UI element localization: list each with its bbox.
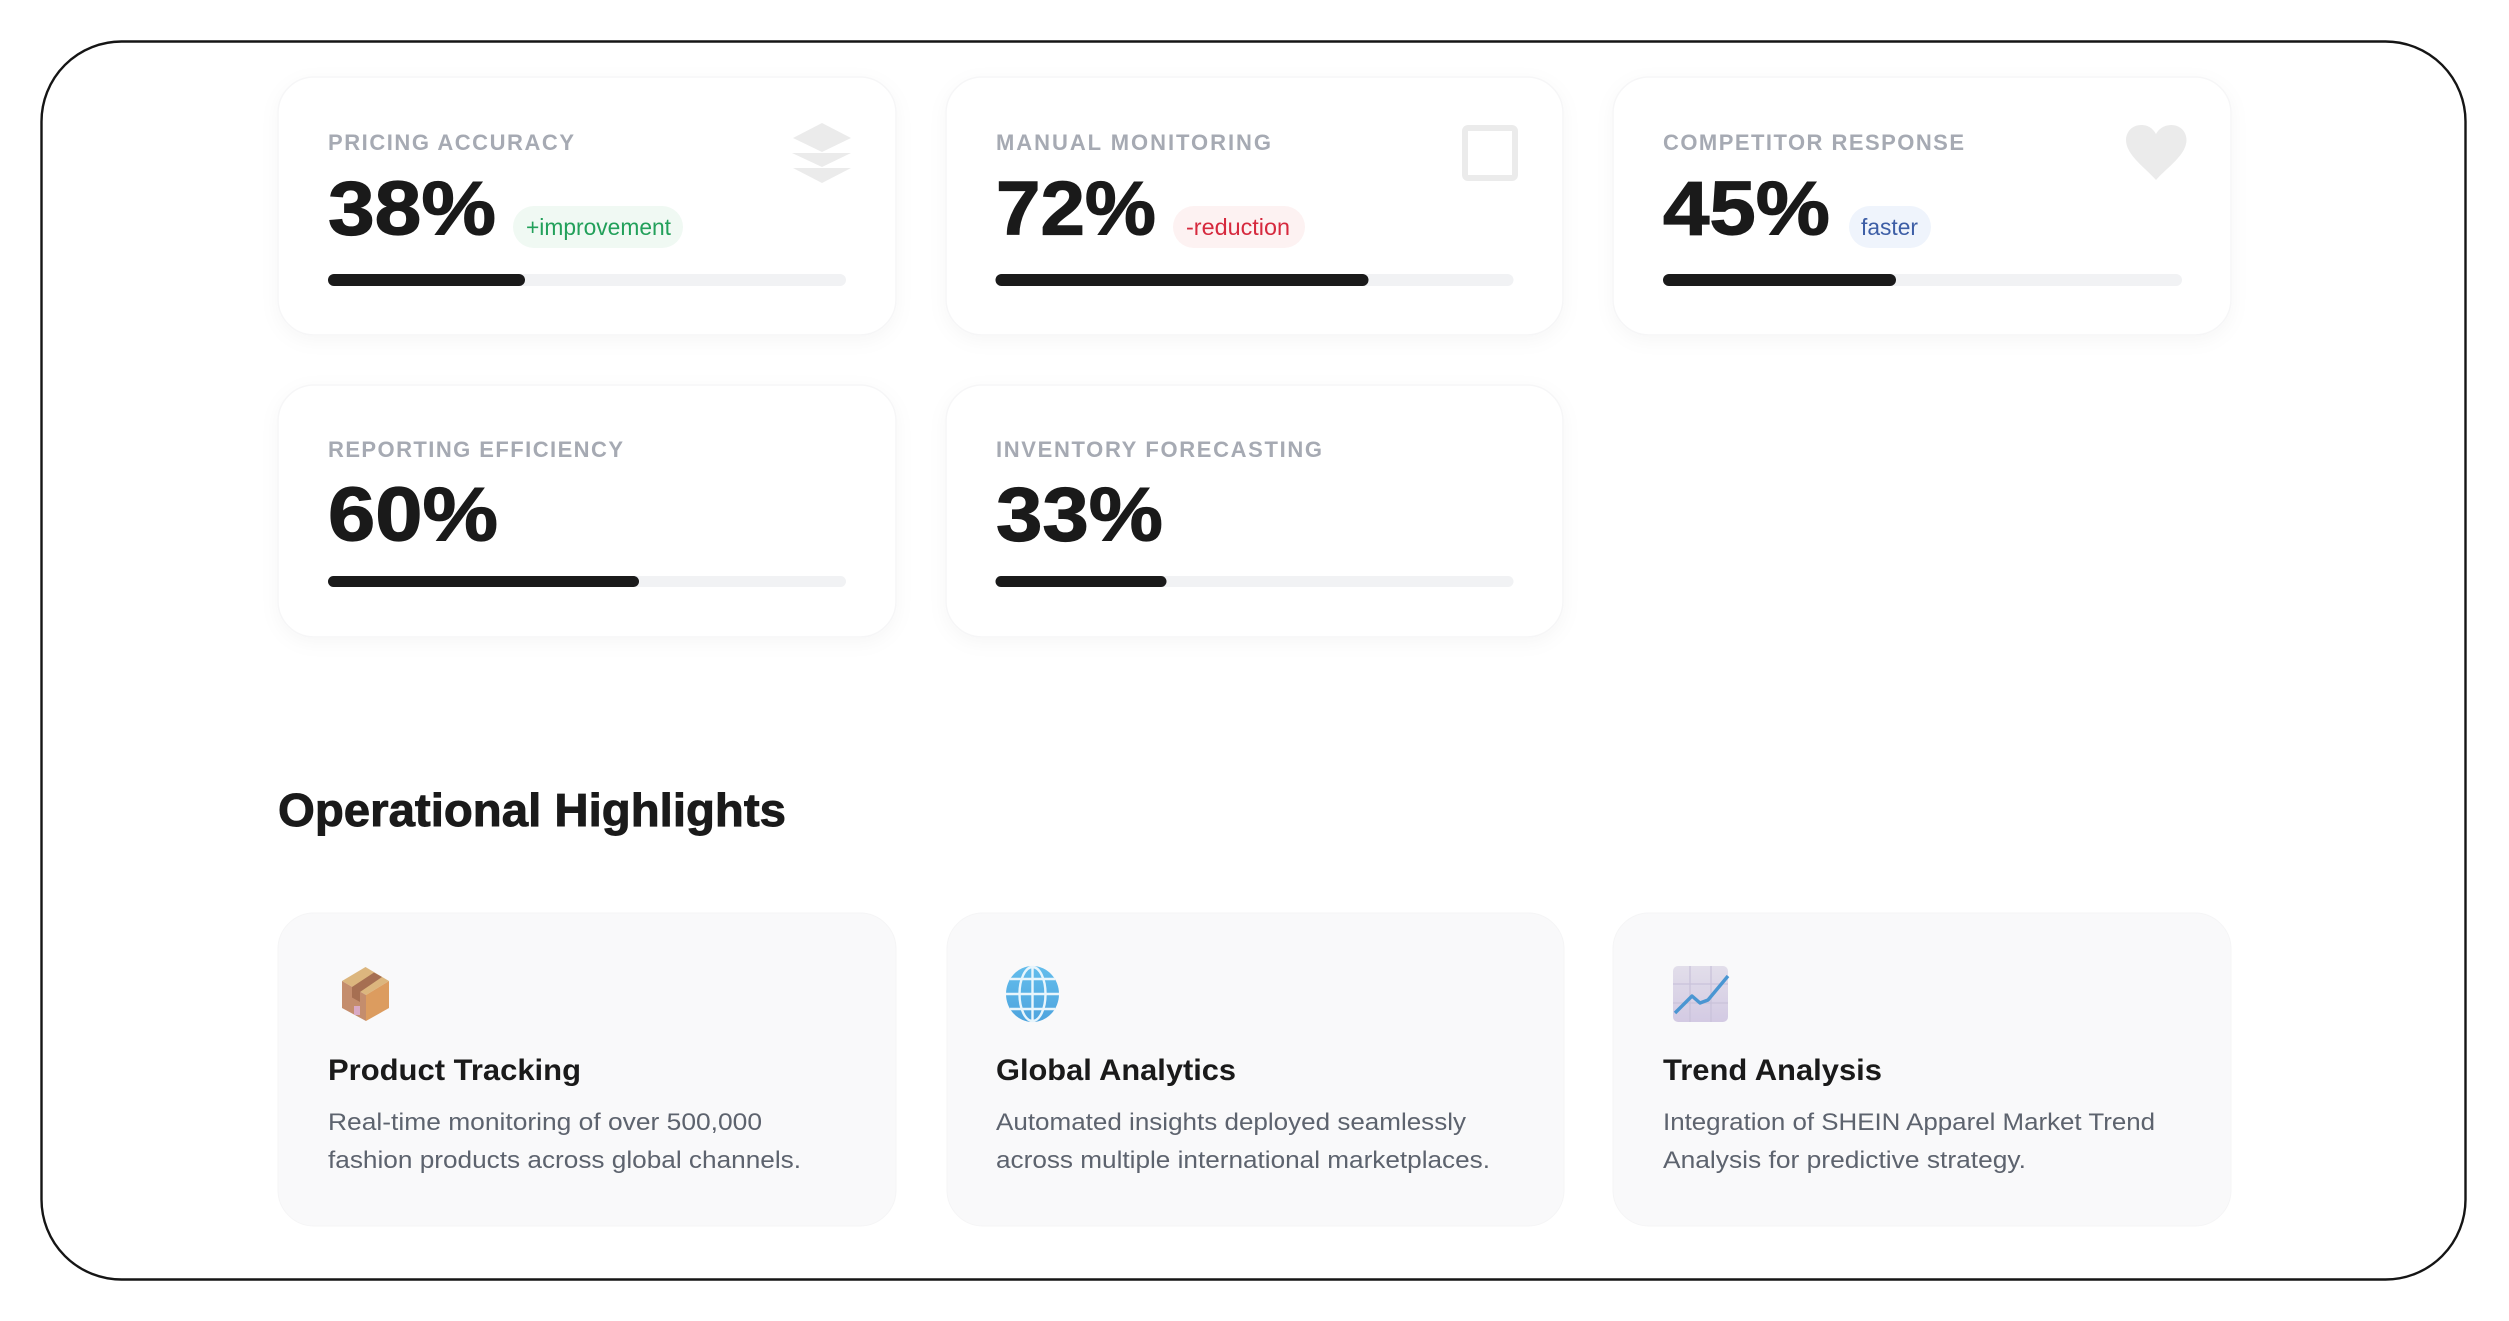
badge: faster <box>1849 206 1931 248</box>
title: trend analysis: Trend Analysis <box>1663 1054 1882 1087</box>
title: product tracking: Product Tracking <box>328 1054 581 1087</box>
badge: improvement: +improvement <box>526 214 672 240</box>
value: 45%: 45% <box>1663 166 1830 252</box>
description: global analytics <box>996 1109 1490 1174</box>
description: product tracking <box>328 1109 801 1174</box>
panel: trend analysis <box>1613 913 2231 1226</box>
progress bar: 33% <box>996 576 1514 587</box>
label: pricing accuracy: PRICING ACCURACY <box>328 130 574 155</box>
progress bar: 60% <box>328 576 846 587</box>
badge: reduction: -reduction <box>1186 214 1290 240</box>
value: 33%: 33% <box>996 472 1163 558</box>
title: global analytics: Global Analytics <box>996 1054 1236 1087</box>
icon: trend chart <box>1673 966 1728 1022</box>
description: product tracking: Real-time monitoring of over 500,000 <box>328 1109 762 1136</box>
panel: global analytics <box>947 913 1564 1226</box>
panel: inventory forecasting <box>946 385 1563 637</box>
progress bar: 72% <box>996 274 1514 286</box>
panel: manual monitoring <box>946 77 1563 335</box>
label: inventory forecasting: INVENTORY FORECASTING <box>996 437 1322 462</box>
description: global analytics: across multiple international marketplaces. <box>996 1147 1490 1174</box>
badge: reduction <box>1173 206 1305 248</box>
description: trend analysis <box>1663 1109 2155 1174</box>
label: competitor response: COMPETITOR RESPONSE <box>1663 130 1964 155</box>
icon: square <box>1465 128 1515 178</box>
heading: operational highlights: Operational Highlights <box>278 784 786 836</box>
panel: reporting efficiency <box>278 385 896 637</box>
icon: layers <box>792 123 851 183</box>
value: 72%: 72% <box>996 166 1156 252</box>
description: trend analysis: Analysis for predictive strategy. <box>1663 1147 2026 1174</box>
icon: heart <box>2126 125 2186 180</box>
label: manual monitoring: MANUAL MONITORING <box>996 130 1271 155</box>
panel: competitor response <box>1613 77 2231 335</box>
panel: pricing accuracy <box>278 77 896 335</box>
value: 38%: 38% <box>328 166 496 252</box>
panel: product tracking <box>278 913 896 1226</box>
icon: package box <box>342 967 389 1021</box>
icon: globe <box>1006 966 1059 1022</box>
badge: improvement <box>513 206 683 248</box>
description: trend analysis: Integration of SHEIN Apparel Market Trend <box>1663 1109 2155 1136</box>
progress bar: 45% <box>1663 274 2182 286</box>
badge: faster: faster <box>1861 214 1918 240</box>
value: 60%: 60% <box>328 472 498 558</box>
label: reporting efficiency: REPORTING EFFICIENCY <box>328 437 623 462</box>
description: product tracking: fashion products across global channels. <box>328 1147 801 1174</box>
progress bar: 38% <box>328 274 846 286</box>
description: global analytics: Automated insights deployed seamlessly <box>996 1109 1466 1136</box>
